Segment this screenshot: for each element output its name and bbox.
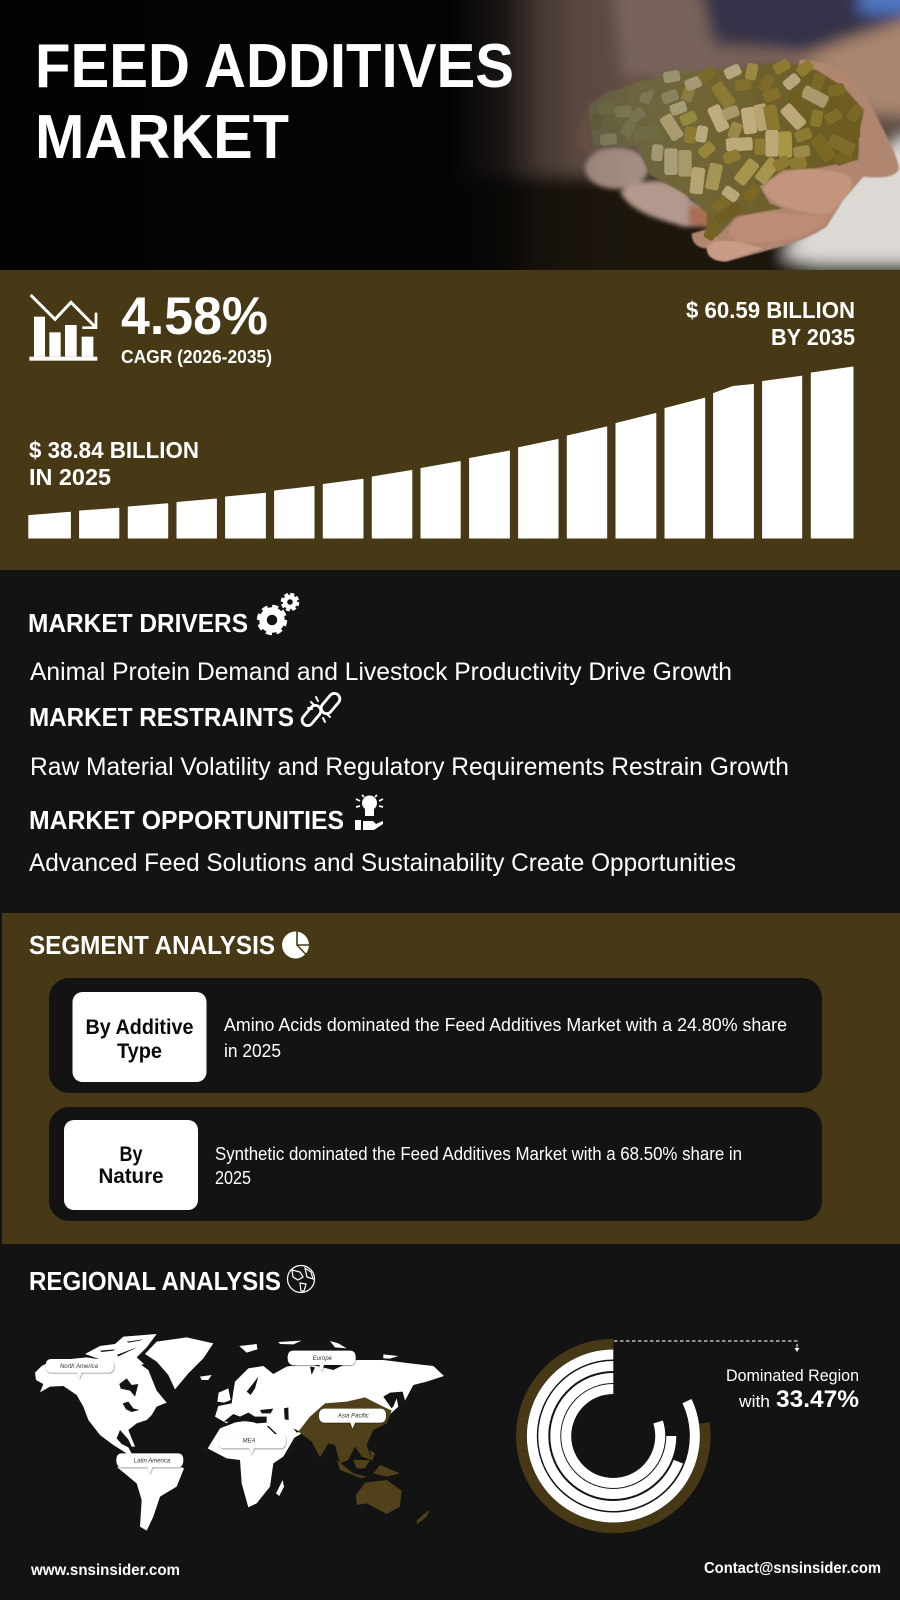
callout: europe [288, 1351, 356, 1372]
2025 market value: IN 2025 [29, 464, 111, 490]
map: south america [117, 1455, 184, 1531]
callout: dominated region: Dominated Region [726, 1366, 859, 1385]
map: madagascar [276, 1480, 284, 1496]
pellet pile [588, 62, 864, 237]
label box: by additive type: By Additive [86, 1016, 194, 1039]
radial share chart [521, 1344, 705, 1528]
text: nature finding: Synthetic dominated the Feed Additives Market with a 68.50% share in [215, 1144, 742, 1164]
map: greenland [145, 1337, 213, 1389]
right hand [692, 60, 899, 262]
text: nature finding [215, 1144, 742, 1188]
2035 market value [686, 297, 855, 350]
map: indonesia and new guinea [337, 1450, 400, 1478]
map: red sea and persian gulf [267, 1426, 300, 1442]
callout: latin america [116, 1453, 183, 1474]
text: additive type finding: Amino Acids dominated the Feed Additives Market with a 24.80% share [224, 1015, 787, 1035]
icon: pie chart [282, 932, 309, 958]
map: mediterranean sea [224, 1413, 267, 1423]
icon: lightbulb in hand [355, 795, 383, 830]
text: nature finding: 2025 [215, 1168, 251, 1188]
map: africa [208, 1421, 294, 1507]
world map [35, 1334, 444, 1531]
map: arctic channels [100, 1339, 143, 1356]
heading: market restraints: MARKET RESTRAINTS [29, 702, 294, 732]
callout: north america [46, 1359, 114, 1379]
bar chart: market growth [29, 367, 853, 538]
hero photo: hands holding feed pellets [430, 0, 900, 288]
callout: europe: Europe [313, 1356, 333, 1362]
heading: segment analysis: SEGMENT ANALYSIS [29, 930, 275, 960]
2035 market value: $ 60.59 BILLION [686, 297, 855, 323]
callout: north america: North America [60, 1364, 99, 1370]
icon: broken chain [300, 691, 342, 728]
dashed leader arrow [614, 1341, 800, 1352]
callout: latin america: Latin America [134, 1458, 171, 1464]
footer contact: Contact@snsinsider.com [704, 1560, 881, 1577]
title [35, 32, 514, 172]
callout: middle east and africa: MEA [243, 1439, 255, 1445]
icon: chart with arrow [29, 295, 97, 361]
footer website: www.snsinsider.com [30, 1562, 180, 1579]
map: japan [385, 1398, 398, 1417]
CAGR label: CAGR (2026-2035) [121, 347, 272, 367]
text: opportunities summary: Advanced Feed Solutions and Sustainability Create Opportunities [29, 849, 736, 877]
map: arctic islands [85, 1334, 157, 1367]
map: east siberian gulf [310, 1367, 315, 1375]
left dark fade over hero [0, 0, 900, 270]
icon: globe [288, 1266, 314, 1292]
callout: dominated region: with [738, 1392, 770, 1411]
label box: by additive type: Type [117, 1040, 162, 1063]
2035 market value: BY 2035 [771, 324, 855, 350]
map: eurasia [215, 1360, 444, 1438]
panel: hero header [0, 0, 900, 288]
panel: market size and CAGR [0, 270, 900, 570]
2025 market value: $ 38.84 BILLION [29, 437, 199, 463]
text: additive type finding [224, 1015, 787, 1061]
label box: by nature: Nature [98, 1165, 164, 1188]
panel: market dynamics [0, 570, 900, 913]
map: australia [356, 1480, 402, 1514]
map: iceland, svalbard and north russia islands [200, 1341, 398, 1380]
map: hudson bay [119, 1378, 138, 1397]
card: by nature [49, 1107, 822, 1221]
icon: gears [258, 594, 298, 634]
panel: regional analysis [29, 1266, 859, 1531]
map: baltic, black and caspian seas [247, 1377, 289, 1420]
callout: dominated region: 33.47% [776, 1386, 859, 1413]
callout: dominated region [726, 1366, 859, 1413]
map: britain [217, 1388, 231, 1403]
callout: asia pacific [319, 1409, 386, 1429]
text: additive type finding: in 2025 [224, 1041, 281, 1061]
title: FEED ADDITIVES [35, 32, 514, 101]
map: new zealand [417, 1510, 430, 1524]
CAGR value: 4.58% [121, 287, 268, 346]
panel: segment analysis [2, 913, 900, 1244]
map: great lakes [123, 1402, 139, 1412]
label box: by additive type [72, 992, 206, 1082]
heading: market drivers: MARKET DRIVERS [28, 608, 248, 638]
callout: asia pacific: Asia Pacific [337, 1413, 369, 1419]
title: MARKET [35, 103, 289, 172]
text: restraints summary: Raw Material Volatility and Regulatory Requirements Restrain Growth [30, 753, 789, 781]
label box: by nature [64, 1120, 198, 1210]
map: asia pacific highlight [298, 1397, 392, 1463]
card: by additive type [49, 978, 822, 1093]
heading: market opportunities: MARKET OPPORTUNITIES [29, 805, 344, 835]
callout: middle east and africa [218, 1434, 286, 1455]
2025 market value [29, 437, 199, 490]
map: north america [35, 1357, 167, 1457]
label box: by nature: By [120, 1143, 143, 1166]
heading: regional analysis: REGIONAL ANALYSIS [29, 1266, 281, 1296]
text: drivers summary: Animal Protein Demand and Livestock Productivity Drive Growth [30, 658, 732, 686]
